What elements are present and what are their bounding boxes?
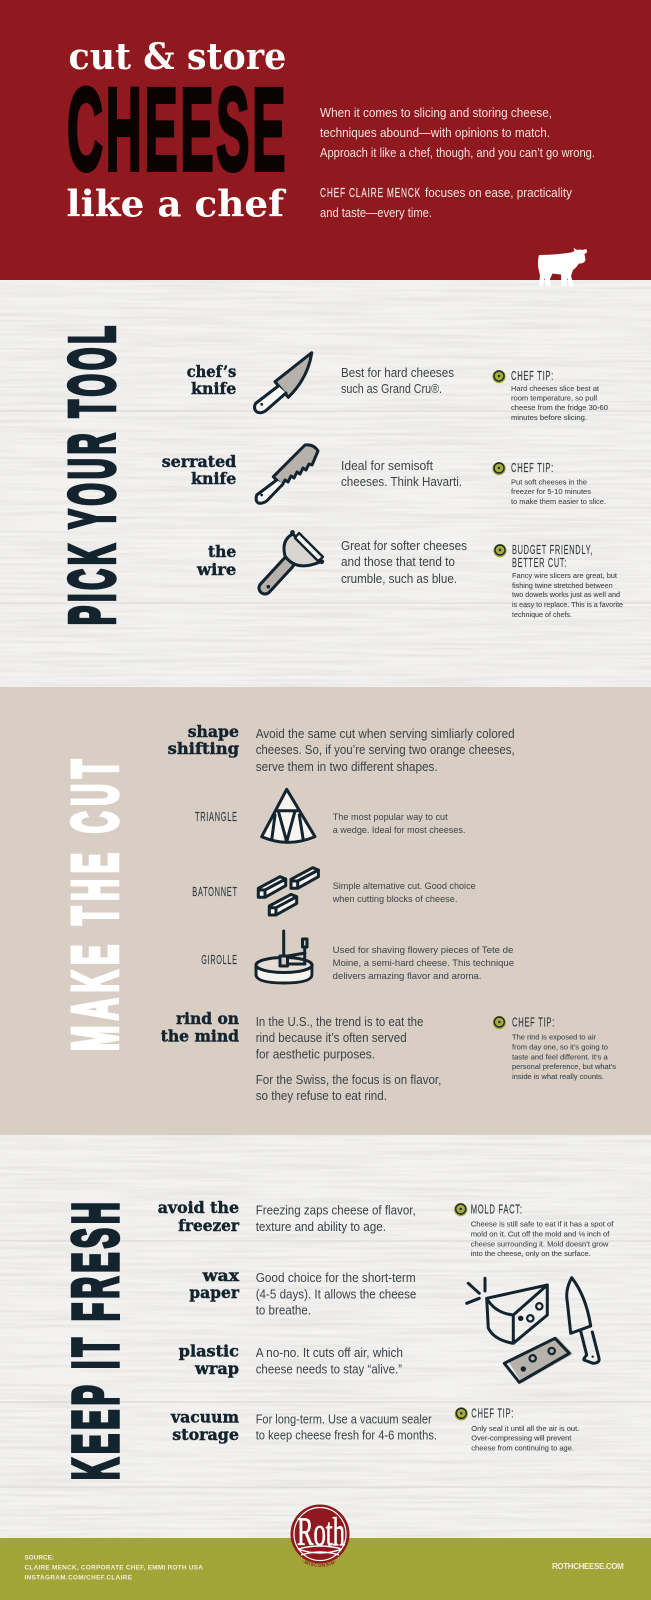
callout: budget friendly, better cut: two dowels works just as well and xyxy=(512,590,620,599)
text: source: INSTAGRAM.COM/CHEF.CLAIRE xyxy=(24,1574,133,1581)
panel: footer xyxy=(0,1504,651,1600)
callout: chef tip, hard cheeses: Hard cheeses slice best at xyxy=(511,384,600,393)
text: avoid the freezer description xyxy=(256,1203,416,1234)
text: batonnet description: when cutting blocks of cheese. xyxy=(332,894,457,904)
callout: chef tip, hard cheeses: CHEF TIP: xyxy=(511,368,554,383)
text: introduction: techniques abound—with opinions to match. xyxy=(320,126,550,140)
icon: knife xyxy=(567,1278,599,1363)
callout: chef tip, the rind: from day one, so it’s going to xyxy=(512,1042,608,1051)
row: batonnet xyxy=(192,868,476,915)
label: the wire: the xyxy=(208,542,236,561)
text: the wire description: Great for softer cheeses xyxy=(341,538,467,553)
label: serrated knife: serrated xyxy=(162,452,236,471)
callout: chef tip, the rind: CHEF TIP: xyxy=(512,1015,555,1030)
text: rind description xyxy=(256,1014,441,1103)
text: triangle description: a wedge. Ideal for most cheeses. xyxy=(333,825,465,835)
text: triangle description: The most popular way to cut xyxy=(333,812,448,822)
text: introduction: Approach it like a chef, though, and you can’t go wrong. xyxy=(320,146,595,160)
icon: triangle cut xyxy=(262,789,317,844)
text: triangle description xyxy=(333,812,465,835)
icon: batonnet cut xyxy=(258,868,318,915)
text: girolle description: delivers amazing flavor and aroma. xyxy=(333,971,481,981)
row: chef's knife xyxy=(187,352,608,422)
label: wax paper: paper xyxy=(189,1283,240,1302)
row: the wire xyxy=(196,530,623,619)
text: vacuum storage description xyxy=(256,1411,437,1442)
title: cut & store xyxy=(68,36,286,78)
label: wax paper xyxy=(189,1266,240,1302)
label: chef's knife: knife xyxy=(191,379,236,398)
text: plastic wrap description xyxy=(256,1345,403,1376)
callout: mold fact: into the cheese, only on the surface. xyxy=(471,1249,591,1258)
icon: cow xyxy=(538,248,587,286)
text: chef's knife description: Best for hard cheeses xyxy=(341,365,454,380)
text: chef claire menck: CHEF CLAIRE MENCK xyxy=(320,185,421,200)
label: the wire: wire xyxy=(196,560,236,579)
icon: serrated knife xyxy=(256,445,318,503)
text: serrated knife description xyxy=(341,458,462,489)
label: shape shifting: shifting xyxy=(168,739,239,758)
text: plastic wrap description: cheese needs to stay “alive.” xyxy=(256,1361,402,1376)
label: rind on the mind: rind on xyxy=(176,1009,239,1028)
label: vacuum storage: vacuum xyxy=(170,1407,239,1426)
text: avoid the freezer description: Freezing zaps cheese of flavor, xyxy=(256,1203,416,1218)
label: serrated knife: knife xyxy=(191,469,236,488)
label: rind on the mind: the mind xyxy=(161,1027,239,1046)
row: vacuum storage xyxy=(170,1407,437,1444)
callout: chef tip, vacuum seal xyxy=(471,1405,579,1453)
panel: make the cut: MAKE THE CUT xyxy=(59,754,131,1051)
icon: tip bullet xyxy=(493,544,507,557)
row: rind on the mind xyxy=(161,1009,616,1103)
callout: mold fact: mold on it. Cut off the mold and ⅛ inch of xyxy=(471,1229,610,1238)
text: wax paper description: Good choice for the short-term xyxy=(256,1270,416,1285)
callout: mold fact: Cheese is still safe to eat if it has a spot of xyxy=(471,1220,614,1229)
text: wax paper description: (4-5 days). It allows the cheese xyxy=(256,1286,416,1301)
panel: make the cut xyxy=(0,687,651,1135)
icon: tip bullet xyxy=(454,1203,467,1216)
callout: budget friendly, better cut xyxy=(512,542,623,619)
callout: budget friendly, better cut: fishing twine stretched between xyxy=(512,581,613,590)
text: shape shifting description: serve them in two different shapes. xyxy=(256,759,438,774)
text: the wire description xyxy=(341,538,467,586)
icon: tip bullet xyxy=(455,1407,468,1420)
text: vacuum storage description: to keep cheese fresh for 4-6 months. xyxy=(256,1427,437,1442)
text: source xyxy=(24,1555,203,1581)
text: introduction: When it comes to slicing and storing cheese, xyxy=(320,106,552,120)
icon: cheese wedge xyxy=(487,1285,547,1343)
text: rind description: rind because it’s often served xyxy=(256,1030,407,1045)
callout: chef tip, vacuum seal: CHEF TIP: xyxy=(471,1405,514,1420)
callout: budget friendly, better cut: technique of chefs. xyxy=(512,610,572,619)
logo: roth wisconsin xyxy=(290,1504,350,1567)
row: plastic wrap xyxy=(179,1342,403,1378)
text: chef's knife description: such as Grand Cru®. xyxy=(341,381,442,396)
label: girolle: GIROLLE xyxy=(201,952,238,967)
icon: tip bullet xyxy=(493,1016,506,1029)
icon: chef's knife xyxy=(255,352,314,413)
panel: pick your tool xyxy=(0,280,651,687)
text: rind description: so they refuse to eat rind. xyxy=(256,1088,387,1103)
icon: tip bullet xyxy=(492,462,506,475)
callout: budget friendly, better cut: BETTER CUT: xyxy=(512,555,567,570)
callout: budget friendly, better cut: is easy to replace. This is a favorite xyxy=(512,600,623,609)
callout: mold fact: MOLD FACT: xyxy=(471,1202,523,1217)
callout: chef tip, hard cheeses xyxy=(511,368,608,422)
label: triangle: TRIANGLE xyxy=(195,809,238,824)
callout: chef tip, vacuum seal: cheese from continuing to age. xyxy=(471,1444,574,1453)
label: chef's knife: chef’s xyxy=(187,362,236,381)
text: girolle description xyxy=(333,945,514,981)
label: vacuum storage xyxy=(170,1407,239,1444)
illustration: cheese wedge, knife and moldy slice xyxy=(467,1278,599,1383)
text: rind description: For the Swiss, the focus is on flavor, xyxy=(256,1072,441,1087)
text: shape shifting description xyxy=(256,726,515,774)
callout: chef tip, soft cheeses: Put soft cheeses in the xyxy=(511,478,587,486)
text: chef's knife description xyxy=(341,365,454,396)
label: batonnet: BATONNET xyxy=(192,884,238,899)
text: girolle description: Used for shaving flowery pieces of Tete de xyxy=(333,945,513,955)
row: triangle xyxy=(195,789,465,844)
logo: roth wisconsin: Roth xyxy=(297,1509,345,1554)
callout: chef tip, soft cheeses xyxy=(511,460,606,506)
label: the wire xyxy=(196,542,236,579)
callout: chef tip, vacuum seal: Over-compressing will prevent xyxy=(471,1434,572,1443)
icon: wire peeler xyxy=(265,530,324,588)
callout: chef tip, the rind: The rind is exposed to air xyxy=(512,1033,596,1042)
label: plastic wrap: wrap xyxy=(194,1359,239,1378)
callout: chef tip, soft cheeses: to make them easier to slice. xyxy=(511,497,606,506)
panel: keep it fresh xyxy=(0,1135,651,1538)
text: the wire description: and those that tend to xyxy=(341,554,455,569)
label: plastic wrap: plastic xyxy=(179,1342,239,1361)
label: shape shifting xyxy=(168,722,239,758)
text: plastic wrap description: A no-no. It cuts off air, which xyxy=(256,1345,403,1360)
panel: header: CHEESE xyxy=(67,64,288,196)
label: rind on the mind xyxy=(161,1009,239,1046)
callout: chef tip, the rind: personal preference, but what’s xyxy=(512,1062,616,1071)
text: girolle description: Moine, a semi-hard cheese. This technique xyxy=(333,958,514,968)
icon: moldy slice xyxy=(504,1337,573,1383)
icon: tip bullet xyxy=(492,370,506,383)
label: serrated knife xyxy=(162,452,236,488)
logo: roth wisconsin: ·WISCONSIN· xyxy=(302,1560,336,1567)
callout: mold fact xyxy=(471,1202,614,1258)
label: chef's knife xyxy=(187,362,236,398)
label: avoid the freezer: avoid the xyxy=(158,1198,239,1217)
icon: spark lines xyxy=(467,1278,485,1303)
label: avoid the freezer: freezer xyxy=(178,1216,240,1235)
text: chef claire menck: and taste—every time. xyxy=(320,206,432,220)
callout: budget friendly, better cut: BUDGET FRIENDLY, xyxy=(512,542,593,557)
row: serrated knife xyxy=(162,445,606,506)
text: shape shifting description: cheeses. So, if you’re serving two orange cheeses, xyxy=(256,742,515,757)
text: serrated knife description: Ideal for semisoft xyxy=(341,458,433,473)
panel: keep it fresh: KEEP IT FRESH xyxy=(60,1198,132,1480)
callout: chef tip, the rind xyxy=(512,1015,616,1081)
callout: chef tip, hard cheeses: cheese from the fridge 30-60 xyxy=(511,403,608,412)
callout: chef tip, hard cheeses: room temperature, so pull xyxy=(511,394,597,402)
text: chef claire menck xyxy=(320,185,573,220)
text: serrated knife description: cheeses. Think Havarti. xyxy=(341,474,462,489)
text: the wire description: crumble, such as blue. xyxy=(341,571,457,586)
text: avoid the freezer description: texture and ability to age. xyxy=(256,1219,386,1234)
label: shape shifting: shape xyxy=(188,722,239,741)
text: wax paper description xyxy=(256,1270,416,1318)
text: batonnet description: Simple alternative cut. Good choice xyxy=(333,881,476,891)
row: girolle xyxy=(201,931,514,984)
text: shape shifting description: Avoid the same cut when serving simliarly colored xyxy=(256,726,515,741)
text: vacuum storage description: For long-term. Use a vacuum sealer xyxy=(256,1411,432,1426)
panel: header xyxy=(0,0,651,286)
callout: chef tip, soft cheeses: CHEF TIP: xyxy=(511,460,554,475)
callout: chef tip, hard cheeses: minutes before slicing. xyxy=(511,413,587,422)
text: batonnet description xyxy=(332,881,476,904)
row: wax paper xyxy=(189,1266,416,1318)
icon: girolle xyxy=(256,931,314,984)
text: source: CLAIRE MENCK, CORPORATE CHEF, EMMI ROTH USA xyxy=(24,1564,203,1571)
text: wax paper description: to breathe. xyxy=(256,1303,311,1318)
text: website: ROTHCHEESE.COM xyxy=(552,1562,624,1571)
row: avoid the freezer xyxy=(158,1198,416,1235)
label: vacuum storage: storage xyxy=(172,1425,239,1444)
label: plastic wrap xyxy=(179,1342,239,1378)
text: source: SOURCE: xyxy=(24,1555,54,1562)
text: rind description: for aesthetic purposes. xyxy=(256,1047,375,1062)
text: introduction xyxy=(320,106,595,160)
label: wax paper: wax xyxy=(202,1266,239,1285)
title: like a chef xyxy=(66,184,287,226)
callout: budget friendly, better cut: Fancy wire slicers are great, but xyxy=(512,571,618,580)
title xyxy=(66,36,288,226)
text: chef claire menck: focuses on ease, practicality xyxy=(425,186,573,200)
callout: chef tip, the rind: taste and feel different. It’s a xyxy=(512,1052,608,1061)
callout: chef tip, the rind: inside is what really counts. xyxy=(512,1072,604,1081)
text: rind description: In the U.S., the trend is to eat the xyxy=(256,1014,423,1029)
callout: chef tip, soft cheeses: freezer for 5-10 minutes xyxy=(511,487,591,496)
callout: mold fact: cheese surrounding it. Mold doesn’t grow xyxy=(471,1239,609,1248)
label: avoid the freezer xyxy=(158,1198,240,1235)
callout: chef tip, vacuum seal: Only seal it until all the air is out. xyxy=(471,1424,579,1433)
